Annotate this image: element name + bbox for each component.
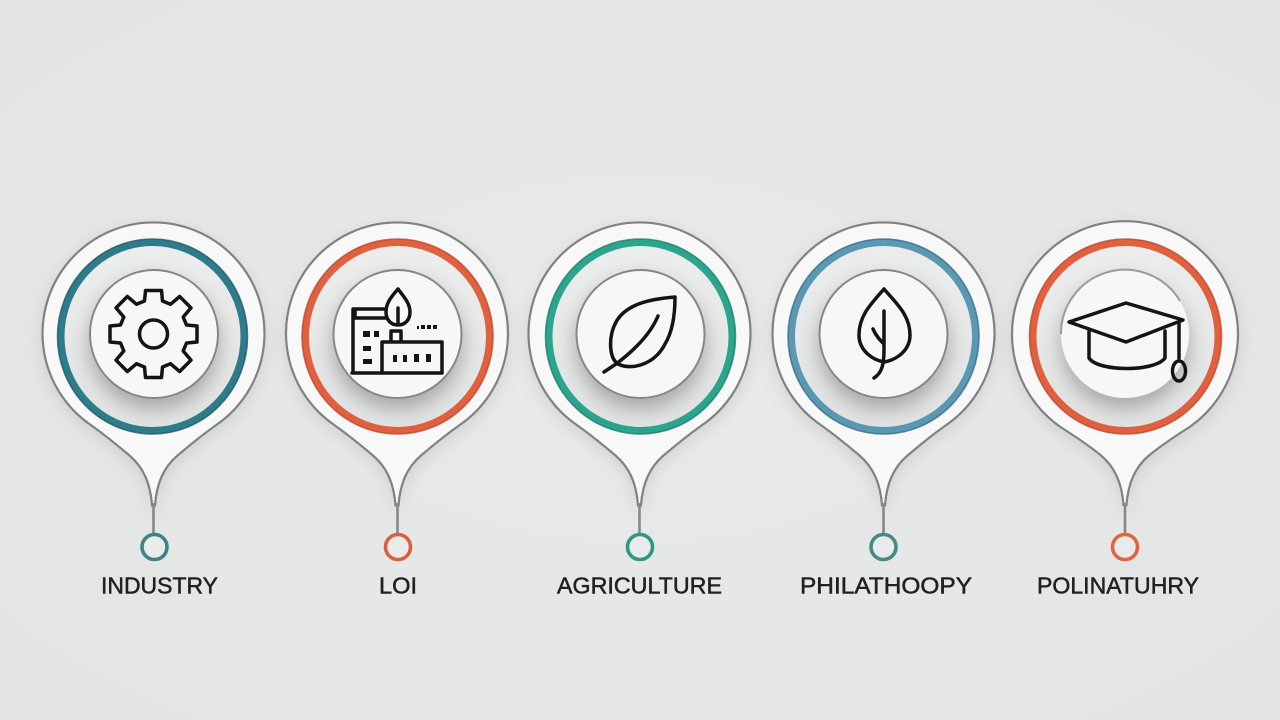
node dot: [142, 534, 167, 560]
pin body: [1012, 221, 1238, 505]
pin: agriculture: [528, 222, 750, 598]
pin: polinatuhry: [1012, 221, 1238, 598]
icon button: [576, 270, 704, 398]
connector stem: [638, 503, 641, 534]
icon: gear: [110, 290, 197, 378]
pin body: [286, 222, 508, 506]
colored ring: [546, 239, 736, 434]
connector stem: [152, 503, 155, 534]
pin: industry: [43, 222, 265, 598]
colored ring: [302, 239, 493, 434]
label: PHILATHOOPY: [800, 572, 972, 598]
connector stem: [1124, 503, 1126, 534]
node dot: [628, 534, 652, 560]
connector stem: [882, 503, 885, 534]
icon: factory with leaf: [352, 289, 442, 373]
icon: graduation cap: [1069, 303, 1186, 381]
pin body: [528, 222, 750, 506]
pin body: [772, 222, 994, 506]
icon: leaf: [604, 297, 675, 372]
node dot: [386, 534, 410, 560]
icon button: [90, 270, 218, 398]
label: LOI: [379, 572, 417, 598]
icon: upright leaf: [859, 289, 910, 378]
button outline arc: [1061, 270, 1180, 334]
pin: philathoopy: [772, 222, 994, 598]
label: INDUSTRY: [101, 572, 218, 598]
pin body: [43, 222, 265, 506]
label: POLINATUHRY: [1037, 572, 1199, 598]
icon button: [820, 270, 948, 398]
icon button: [334, 270, 462, 398]
pin: LOI: [286, 222, 508, 598]
colored ring: [58, 239, 248, 434]
node dot: [1112, 534, 1138, 560]
colored ring: [788, 239, 979, 434]
label: AGRICULTURE: [557, 572, 722, 598]
node dot: [871, 534, 896, 560]
connector stem: [396, 503, 399, 534]
colored ring: [1030, 239, 1222, 434]
icon button: [1061, 270, 1189, 398]
